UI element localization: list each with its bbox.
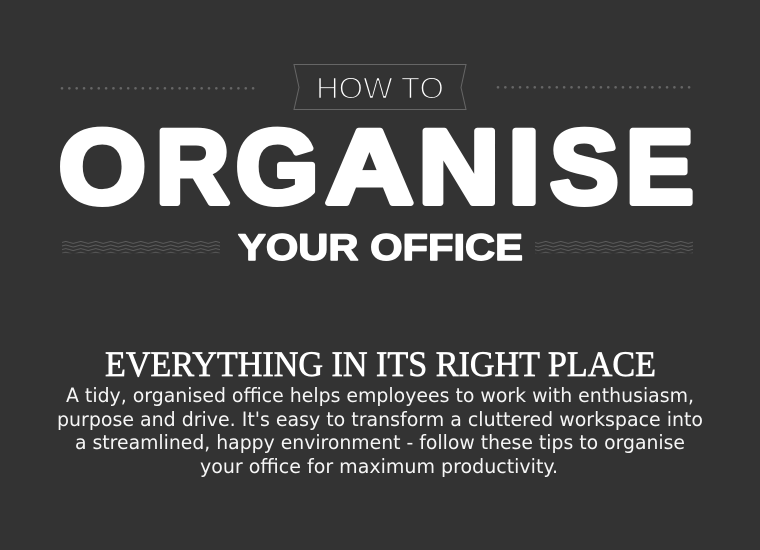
intro text block: [57, 384, 703, 478]
intro text block: A tidy, organised office helps employees to work with enthusiasm,: [66, 384, 694, 407]
wave divider right: [535, 241, 693, 253]
intro text block: your office for maximum productivity.: [200, 455, 558, 478]
title: organise: I: [508, 109, 540, 226]
title: your office: YOUR OFFICE: [238, 227, 523, 268]
dotted line right: [498, 86, 692, 89]
title: how to: HOW TO: [316, 70, 444, 106]
title: organise: [59, 108, 694, 226]
ribbon banner: [294, 64, 466, 110]
title: organise: G: [236, 109, 319, 226]
title: organise: A: [326, 109, 413, 226]
title: organise: R: [156, 108, 229, 225]
heading: EVERYTHING IN ITS RIGHT PLACE: [105, 344, 656, 384]
title: organise: O: [59, 109, 146, 226]
wave divider left: [62, 241, 220, 253]
title: organise: S: [550, 109, 619, 226]
intro text block: a streamlined, happy environment - follow these tips to organise: [75, 431, 685, 454]
title: organise: N: [418, 109, 499, 226]
intro text block: purpose and drive. It's easy to transform a cluttered workspace into: [57, 408, 703, 431]
dotted line left: [62, 87, 256, 90]
title: organise: E: [626, 108, 694, 225]
